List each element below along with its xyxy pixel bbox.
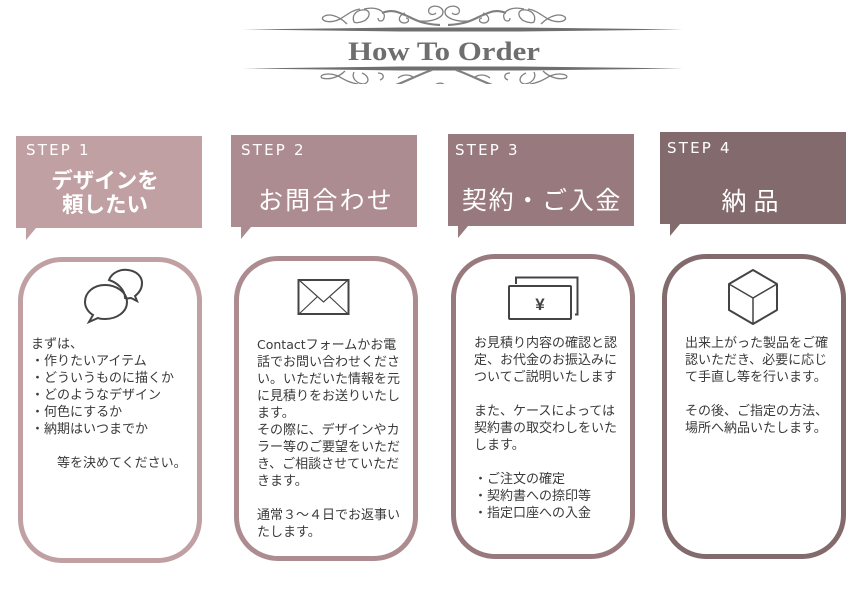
panel 3 text: お見積り内容の確認と認 定、お代金のお振込みに ついてご説明いたします また、ケースによっては 契約書の取交わしをいた します。 ・ご注文の確定 ・契約書への捺印等 ・指定口座への入金 <box>474 335 617 520</box>
step 1 heading bubble: 頼したい <box>62 193 148 217</box>
step 4 heading bubble: STEP 4 <box>667 139 732 157</box>
step 4 heading bubble <box>660 132 846 236</box>
panel 1 outline <box>18 257 202 563</box>
panel 1 text: まずは、 ・作りたいアイテム ・どういうものに描くか ・どのようなデザイン ・何色にするか ・納期はいつまでか 等を決めてください。 <box>31 336 187 470</box>
header ornament and title <box>245 6 681 84</box>
icon: cube <box>728 269 778 325</box>
bottom ornament <box>321 70 567 87</box>
title: How To Order <box>348 37 540 66</box>
panel 2 text: Contactフォームかお電 話でお問い合わせくださ い。いただいた情報を元 に見積りをお送りいたし ます。 その際に、デザインやカ ラー等のご要望をいただ き、ご相談させていただ きます。 通常３～４日でお返事い たします。 <box>257 337 400 539</box>
step 1 heading bubble <box>16 136 202 240</box>
panel 2 outline <box>234 256 418 561</box>
step 1 heading bubble: デザインを <box>51 169 159 193</box>
step 2 heading bubble <box>231 135 417 239</box>
step 2 heading bubble: お問合わせ <box>258 187 394 215</box>
step 3 heading bubble <box>448 134 634 238</box>
bottom rule <box>242 66 683 70</box>
icon: envelope <box>298 279 350 315</box>
icon: yen banknotes: ¥ <box>535 295 545 314</box>
panel 4 text: 出来上がった製品をご確 認いただき、必要に応じ て手直し等を行います。 その後、ご指定の方法、 場所へ納品いたします。 <box>685 335 828 435</box>
step 4 heading bubble: 納 品 <box>722 188 778 216</box>
panel 3 outline <box>451 254 635 559</box>
top rule <box>242 28 683 32</box>
step 3 heading bubble: 契約・ご入金 <box>462 187 622 215</box>
step 1 heading bubble: STEP 1 <box>26 141 91 159</box>
step 2 heading bubble: STEP 2 <box>241 141 306 159</box>
icon: speech bubbles <box>84 268 143 324</box>
top ornament <box>322 6 566 25</box>
step 3 heading bubble: STEP 3 <box>455 141 520 159</box>
icon: yen banknotes <box>508 276 578 320</box>
panel 4 outline <box>662 254 846 559</box>
